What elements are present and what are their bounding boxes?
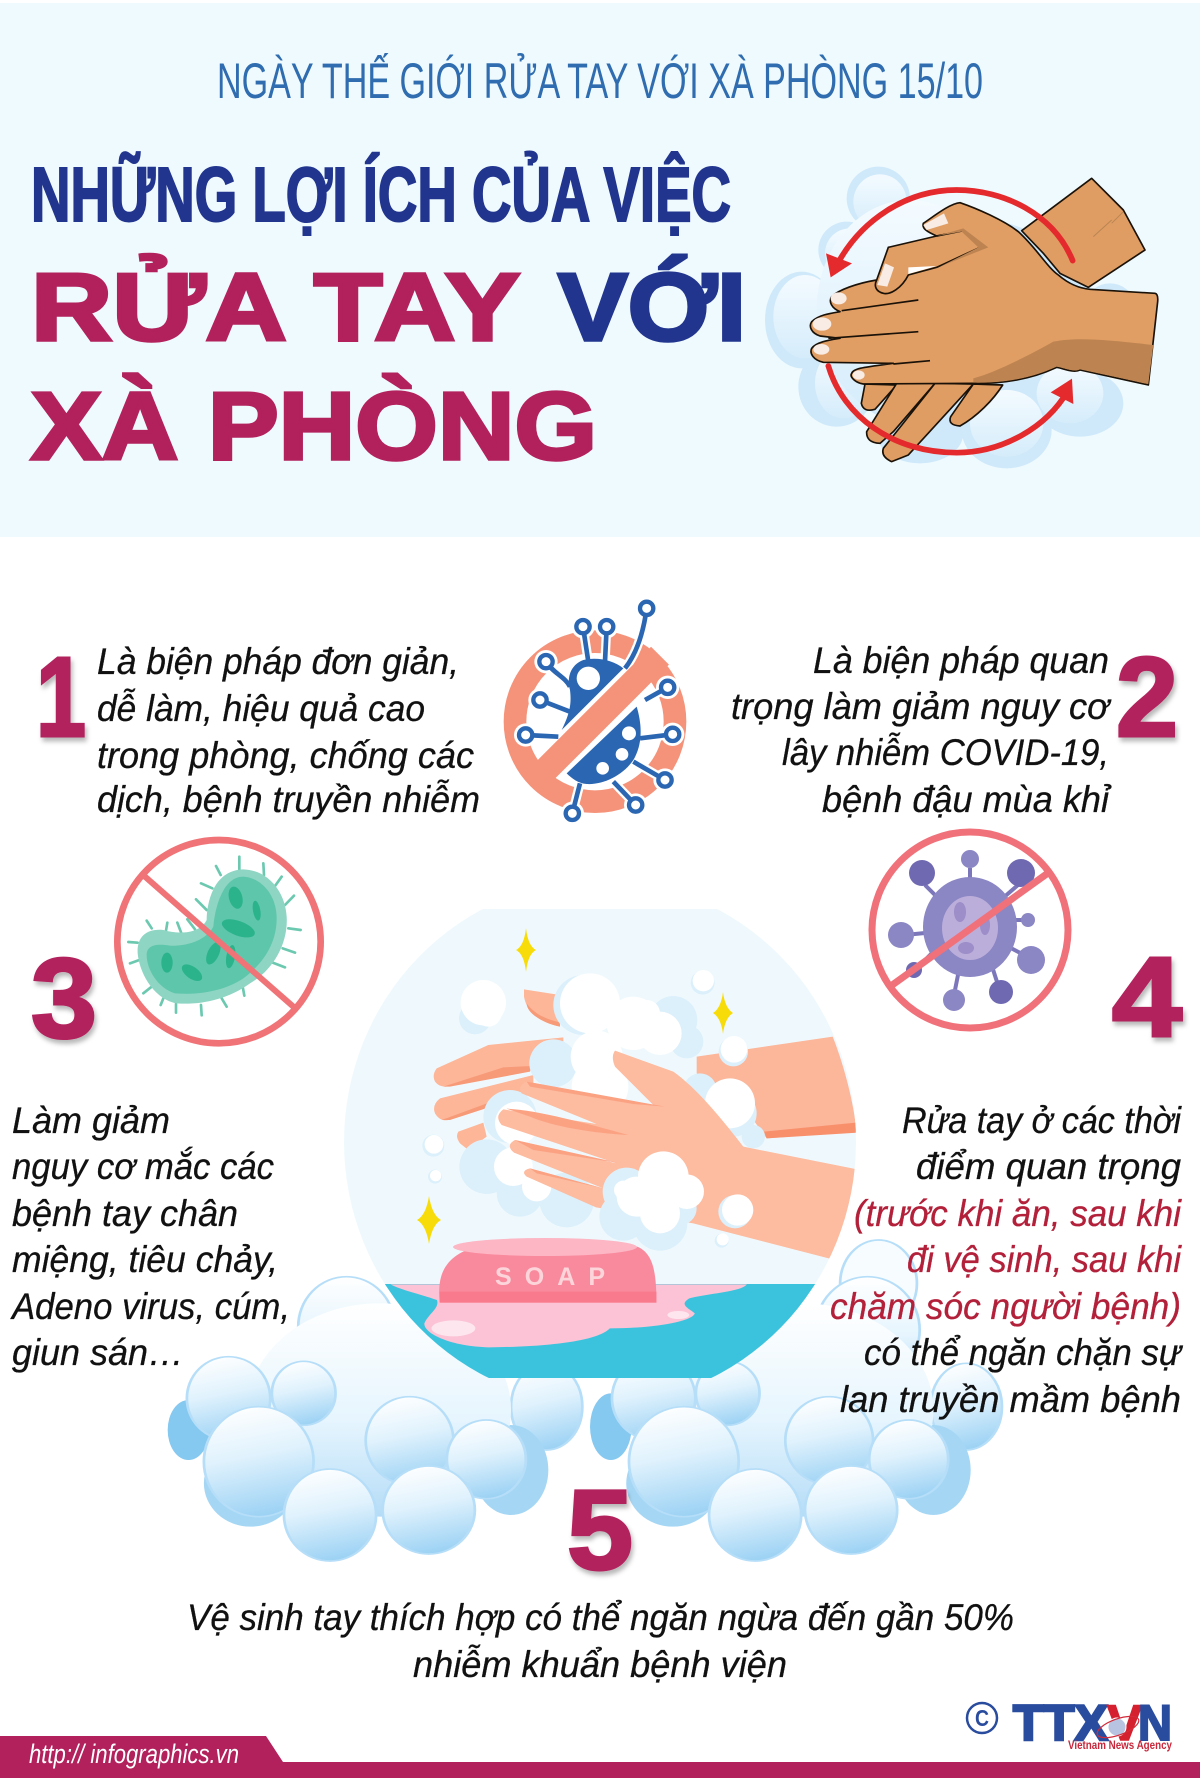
virus body upper half [562,659,623,730]
spikes [905,868,1028,990]
foam white [494,973,755,1201]
virus body [923,877,1017,977]
icon: crossed-out bacteria [117,840,321,1043]
puddle [390,1284,747,1347]
prohibition ring [117,840,321,1043]
back hand fingers [434,989,563,1150]
bubble highlights [425,970,753,1245]
sparkles [417,928,733,1244]
left foam cloud [168,1277,582,1561]
virus body lower half [567,707,641,784]
ring [515,642,675,802]
wrist foam white [614,1151,704,1233]
text block 4: Rửa tay ở các thời [902,1100,1183,1141]
text block 4: đi vệ sinh, sau khi [907,1239,1183,1280]
virus organelles [954,902,990,954]
text block 3: miệng, tiêu chảy, [12,1239,278,1280]
illustration: washing hands with soap [344,909,856,1378]
text block 5: nhiễm khuẩn bệnh viện [413,1644,787,1685]
wrist foam [599,1151,704,1251]
front hand [810,203,1158,385]
text block 4: điểm quan trọng [916,1146,1181,1187]
title line 1: NHỮNG LỢI ÍCH CỦA VIỆC [31,151,731,238]
soap label: SOAP [495,1263,605,1291]
halo end caps [514,597,684,825]
text block 2: lây nhiễm COVID-19, [782,732,1109,773]
agency name TTX: TTX [1013,1695,1108,1751]
text block 3: nguy cơ mắc các [12,1146,274,1187]
spike ends [519,602,679,820]
text block 1: dịch, bệnh truyền nhiễm [97,779,480,820]
number 1: 1 [36,634,86,760]
text block 4: chăm sóc người bệnh) [830,1286,1181,1327]
prohibition ring [872,832,1068,1028]
illustration: hands and foam [417,928,857,1260]
text block 5 [187,1597,1014,1685]
text block 4 [830,1100,1183,1420]
text block 3: Adeno virus, cúm, [10,1286,290,1327]
finger notch and crease lines [828,231,980,364]
number 4: 4 [1112,934,1182,1060]
text block 5: Vệ sinh tay thích hợp có thể ngăn ngừa đến gần 50% [187,1597,1014,1638]
panel: header background [0,3,1200,537]
finger creases [507,1082,665,1188]
icon: crossed-out virus purple [872,832,1068,1028]
agency name V: V [1107,1695,1143,1751]
text block 3: Làm giảm [12,1100,170,1141]
text block 1 [97,641,480,820]
bacteria hairs [128,857,301,1015]
soap cloud behind hands [765,167,1133,468]
wrist shadow [973,339,1153,384]
bacterium inner body [147,877,277,994]
left foam puff [459,980,506,1034]
soap bar lower band [440,1292,656,1303]
basin [384,1284,816,1378]
soap cloud highlights [773,174,1103,457]
soap bar body [439,1240,656,1303]
foam shadow [459,975,765,1227]
text block 2: bệnh đậu mùa khỉ [822,779,1112,820]
diagonal slash [540,656,660,776]
back wrist [1022,178,1145,287]
back arm dark stripe [764,1123,857,1138]
agency name N: N [1138,1695,1172,1751]
title line 3: XÀ PHÒNG [31,373,597,480]
loose soap bubbles [422,970,753,1248]
puddle highlights [432,1311,689,1336]
back finger shading [442,1003,560,1120]
logo: TTXVN [967,1695,1172,1752]
clouds of foam [168,1240,1002,1561]
text block 3 [10,1100,290,1373]
prohibition slash [888,873,1048,988]
bacterium outer body [138,869,287,1004]
text block 3: giun sán… [12,1332,184,1373]
text block 4: có thể ngăn chặn sự [864,1332,1183,1373]
text block 1: Là biện pháp đơn giản, [97,641,459,682]
virus dots [577,667,636,775]
text block 4: (trước khi ăn, sau khi [854,1193,1183,1234]
back arm [697,1037,857,1138]
website url: http:// infographics.vn [29,1739,239,1769]
title line 2: red part: RỬA TAY [31,253,520,361]
globe [1108,1718,1126,1736]
virus spikes [526,608,673,813]
icon: crossed-out virus [514,597,684,825]
bubble shadows [422,971,752,1248]
text block 3: bệnh tay chân [12,1193,238,1234]
virus spike halo [526,608,673,813]
gap between fingers [908,266,937,274]
wrist creases [1093,212,1123,237]
globe swoosh [1095,1712,1141,1742]
front hand and arm [498,1051,857,1260]
copyright letter: C [975,1705,989,1731]
arrow heads [826,253,1073,404]
virus nucleus [942,896,998,960]
thumb shadow [937,228,988,267]
oval background [344,909,856,1364]
wrist foam shadow [599,1168,697,1251]
number 3: 3 [31,935,97,1061]
red circular arrows [828,190,1073,453]
bacterium nuclei [161,885,262,984]
title [31,151,746,480]
number 5: 5 [567,1467,633,1593]
text block 4: lan truyền mầm bệnh [840,1379,1181,1420]
spike tips [888,850,1045,1011]
text block 1: dễ làm, hiệu quả cao [97,688,425,729]
prohibition slash [145,877,293,1007]
text block 2: trọng làm giảm nguy cơ [731,686,1112,727]
text block 2: Là biện pháp quan [813,640,1109,681]
soap bar top [453,1238,637,1256]
text block 1: trong phòng, chống các [97,735,474,776]
back hand fingers [861,383,1003,462]
text block 2 [731,640,1112,820]
right foam cloud [590,1240,1002,1561]
title line 2: blue part: VỚI [558,254,746,361]
nails [813,213,948,380]
copyright ring [967,1703,997,1733]
number 2: 2 [1116,634,1178,760]
agency tagline: Vietnam News Agency [1068,1738,1172,1752]
soap puddle and bar [390,1240,747,1347]
footer banner [0,1736,1200,1778]
icon: hands rubbing with arrows [765,167,1158,468]
